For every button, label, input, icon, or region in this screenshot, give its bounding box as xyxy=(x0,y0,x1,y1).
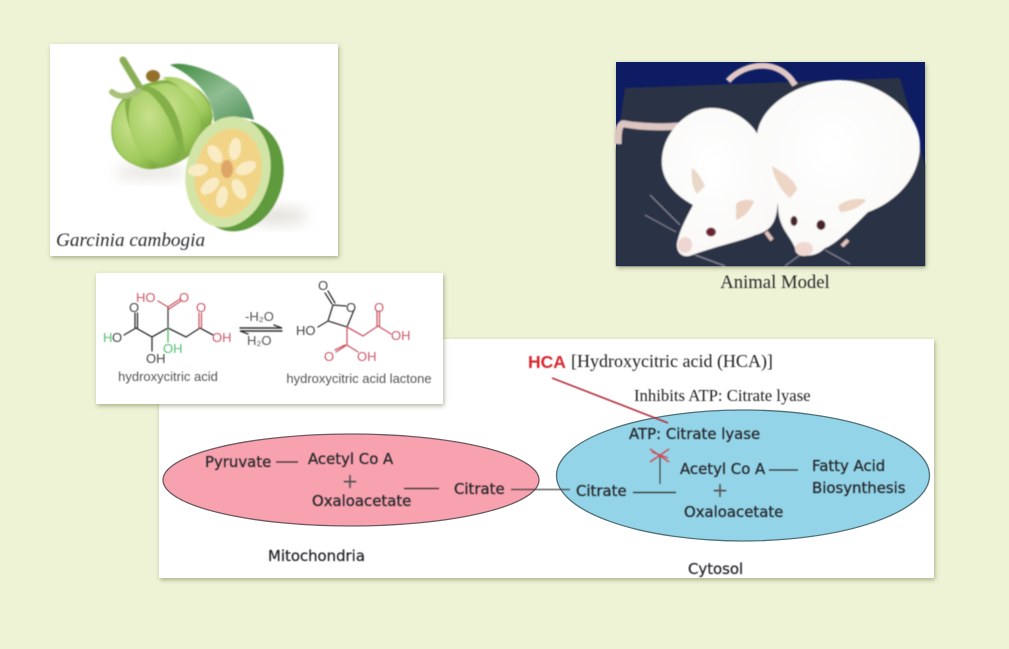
panel: chemical structures xyxy=(96,273,443,404)
icon: small rat xyxy=(662,108,778,256)
whiskers xyxy=(645,195,850,266)
hydroxycitric acid lactone structure: OH xyxy=(391,328,410,343)
cytosol pathway: Oxaloacetate xyxy=(684,503,783,521)
mitochondria ellipse xyxy=(163,434,539,526)
equilibrium arrows: H₂O xyxy=(247,333,272,348)
mitochondria pathway: Acetyl Co A xyxy=(308,450,394,468)
icon: cut fruit xyxy=(175,108,295,241)
panel: animal model photo xyxy=(616,62,925,293)
hydroxycitric acid structure: HO xyxy=(136,290,156,305)
hydroxycitric acid structure: OH xyxy=(146,351,166,366)
hydroxycitric acid lactone structure: OH xyxy=(357,349,376,364)
icon: tails xyxy=(728,66,795,85)
cytosol pathway xyxy=(576,425,906,578)
hydroxycitric acid lactone structure: O xyxy=(318,278,328,293)
HCA inhibitor label: HCA xyxy=(528,352,566,372)
hydroxycitric acid lactone structure: HO xyxy=(296,323,316,338)
cytosol pathway: + xyxy=(712,478,728,502)
mitochondria pathway xyxy=(205,450,570,565)
label: Mitochondria: Mitochondria xyxy=(268,547,365,565)
equilibrium arrows xyxy=(240,309,282,348)
panel: Garcinia cambogia photo xyxy=(50,44,338,256)
cytosol pathway: Biosynthesis xyxy=(812,479,906,497)
hydroxycitric acid lactone structure xyxy=(286,278,432,386)
hydroxycitric acid lactone structure: O xyxy=(324,349,334,364)
hydroxycitric acid structure: H xyxy=(103,330,112,345)
HCA inhibitor label: Inhibits ATP: Citrate lyase xyxy=(634,386,811,405)
hydroxycitric acid structure: O xyxy=(196,300,206,315)
icon: whole fruit xyxy=(111,60,213,169)
hydroxycitric acid structure: hydroxycitric acid xyxy=(118,369,218,384)
hydroxycitric acid structure: OH xyxy=(163,341,182,356)
mitochondria pathway: Citrate xyxy=(454,480,505,498)
mitochondria pathway: + xyxy=(342,469,358,493)
HCA inhibitor label xyxy=(528,351,811,423)
caption: Animal Model: Animal Model xyxy=(720,272,830,293)
hydroxycitric acid lactone structure: hydroxycitric acid lactone xyxy=(286,371,432,386)
hydroxycitric acid structure: O xyxy=(112,330,122,345)
hydroxycitric acid structure: OH xyxy=(212,330,232,345)
mitochondria pathway: Pyruvate xyxy=(205,453,271,471)
caption: Garcinia cambogia: Garcinia cambogia xyxy=(56,230,205,251)
label: Cytosol: Cytosol xyxy=(688,560,743,578)
icon: leaf xyxy=(170,64,254,122)
cytosol pathway: Citrate xyxy=(576,482,627,500)
hydroxycitric acid lactone structure: O xyxy=(374,300,384,315)
panel: metabolic pathway xyxy=(159,339,934,578)
icon: obese rat xyxy=(757,80,920,256)
hydroxycitric acid lactone structure: O xyxy=(346,300,356,315)
hydroxycitric acid structure: O xyxy=(129,300,139,315)
equilibrium arrows: -H₂O xyxy=(245,309,274,324)
cytosol pathway: Acetyl Co A xyxy=(680,460,766,478)
hydroxycitric acid structure: O xyxy=(179,290,189,305)
cytosol pathway: ATP: Citrate lyase xyxy=(629,425,760,443)
cytosol pathway: Fatty Acid xyxy=(812,457,885,475)
mitochondria pathway: Oxaloacetate xyxy=(312,492,411,510)
HCA inhibitor label: [Hydroxycitric acid (HCA)] xyxy=(571,351,773,372)
hydroxycitric acid structure xyxy=(103,290,232,384)
cytosol ellipse xyxy=(556,410,930,541)
